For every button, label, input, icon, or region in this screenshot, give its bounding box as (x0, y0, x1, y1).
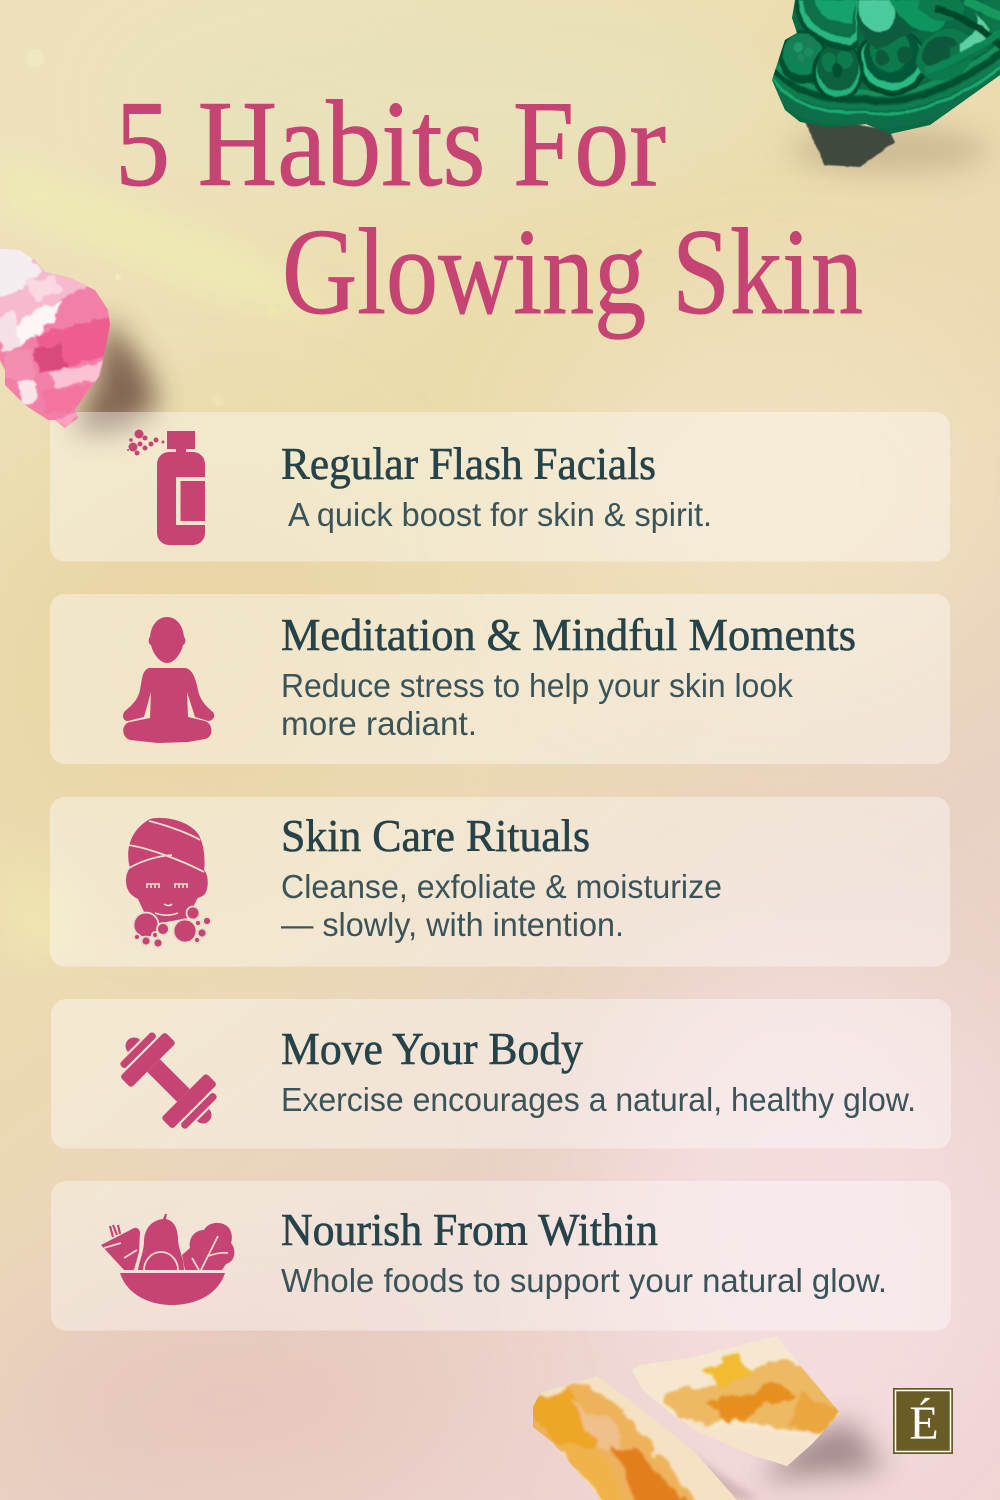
icon: face with turban (126, 818, 211, 948)
text: move your body description: Exercise encourages a natural, healthy glow. (281, 1081, 916, 1118)
title: Glowing Skin (282, 203, 863, 340)
panel: skin care rituals (50, 797, 950, 966)
heading: nourish from within: Nourish From Within (281, 1204, 658, 1255)
lobe D (916, 29, 972, 81)
heading: move your body: Move Your Body (281, 1023, 583, 1074)
title (115, 75, 863, 340)
text: meditation description (281, 667, 793, 742)
text: nourish description: Whole foods to support your natural glow. (281, 1262, 887, 1299)
logo: É (909, 1397, 939, 1450)
heading: meditation and mindful moments: Meditation & Mindful Moments (281, 609, 856, 660)
lobe G right (950, 0, 1000, 58)
panel: nourish from within (51, 1181, 951, 1330)
lobe E top left (796, 0, 858, 51)
icon: bowl of vegetables (101, 1214, 234, 1305)
crystal: malachite (760, 0, 1000, 174)
text: meditation description: more radiant. (281, 705, 477, 742)
icon: meditating figure (123, 617, 214, 743)
shadow: rose quartz (70, 315, 160, 432)
panel: regular flash facials (50, 412, 950, 562)
text: skin care description: Cleanse, exfoliate & moisturize (281, 868, 722, 905)
logo (893, 1388, 953, 1454)
heading: regular flash facials: Regular Flash Facials (281, 438, 656, 489)
text: skin care description: — slowly, with intention. (281, 906, 624, 943)
icon: spray bottle (127, 430, 205, 545)
icon: dumbbell (106, 1018, 231, 1143)
text: meditation description: Reduce stress to help your skin look (281, 667, 793, 704)
text: regular flash facials description: A quick boost for skin & spirit. (288, 496, 712, 533)
panel: move your body (51, 999, 951, 1148)
bottom concentric bands (770, 42, 1000, 122)
title: 5 Habits For (115, 75, 666, 212)
panel: meditation and mindful moments (50, 594, 950, 764)
heading: skin care rituals: Skin Care Rituals (281, 810, 590, 861)
text: skin care description (281, 868, 722, 943)
crystal: rose quartz (0, 248, 110, 428)
lobe C (857, 33, 925, 98)
lobe F fan (857, 12, 918, 50)
lobe B (812, 46, 864, 97)
crystal: citrine pair (525, 1335, 885, 1500)
lobe A (779, 30, 827, 84)
